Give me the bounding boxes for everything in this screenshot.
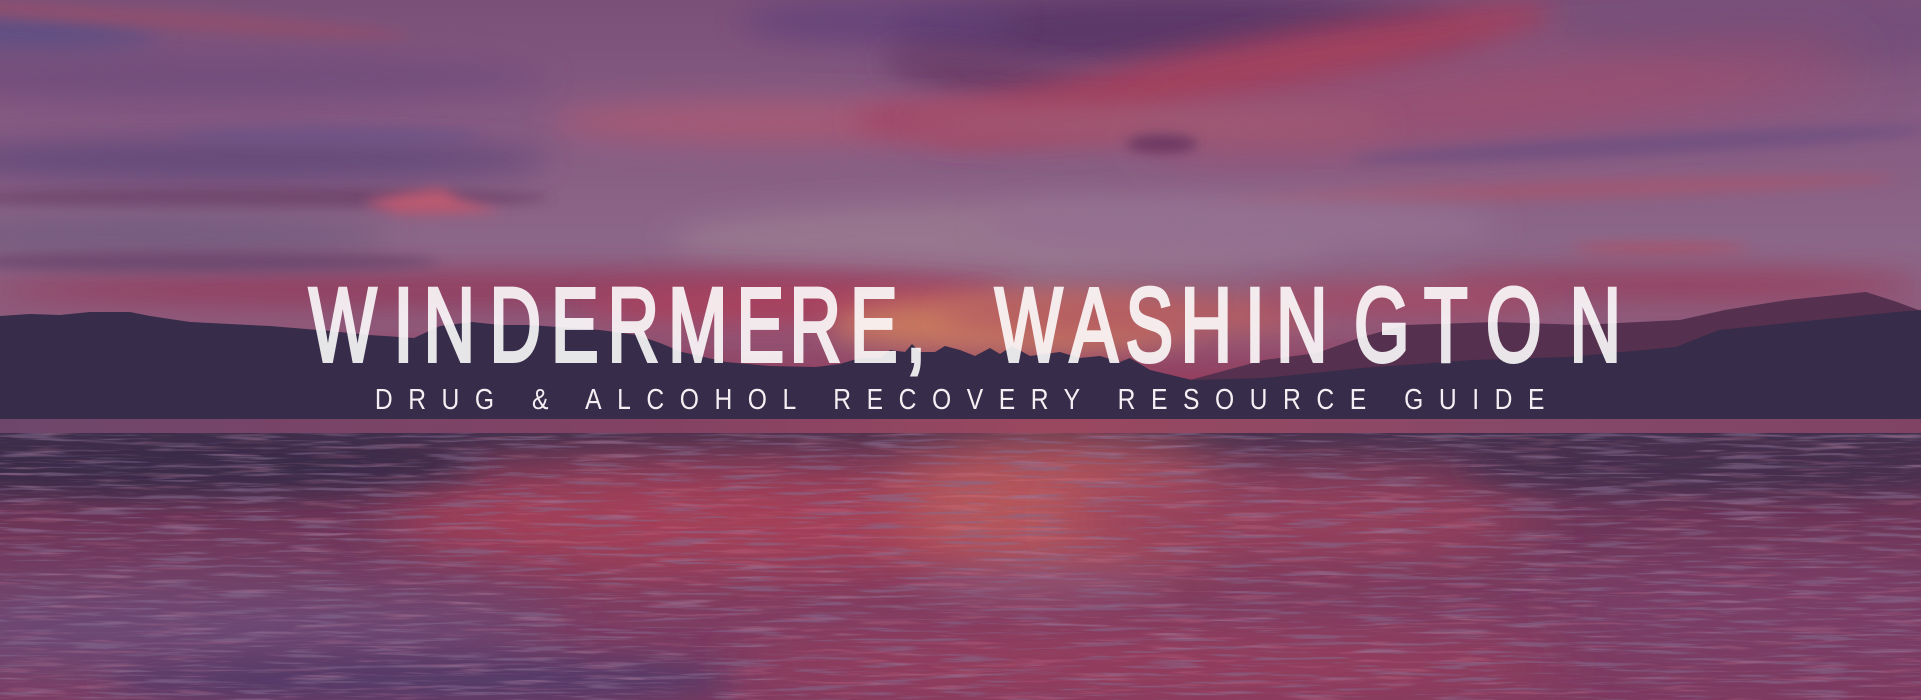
title word: Washington: WASHINGTON bbox=[995, 267, 1621, 384]
water reflection bbox=[0, 435, 1921, 700]
subtitle: DRUG & ALCOHOL RECOVERY RESOURCE GUIDE bbox=[375, 383, 1544, 415]
sky: pink cloud bbox=[362, 188, 505, 214]
water ripples bbox=[0, 433, 1921, 700]
sky: horizon glow bbox=[0, 252, 1920, 353]
far water strip bbox=[0, 419, 1921, 433]
distant hill bbox=[1190, 292, 1921, 419]
sky: upper bands bbox=[0, 0, 1921, 106]
lake bbox=[0, 419, 1921, 700]
sky: red streak bbox=[550, 0, 1861, 169]
shoreline silhouette bbox=[0, 310, 1921, 419]
sky: dark cloud spot bbox=[1126, 135, 1198, 153]
sky: blue-violet bands bbox=[0, 120, 1921, 276]
title bbox=[309, 267, 1621, 384]
title word: Windermere: WINDERMERE, bbox=[309, 267, 926, 384]
sky bbox=[0, 0, 1921, 380]
